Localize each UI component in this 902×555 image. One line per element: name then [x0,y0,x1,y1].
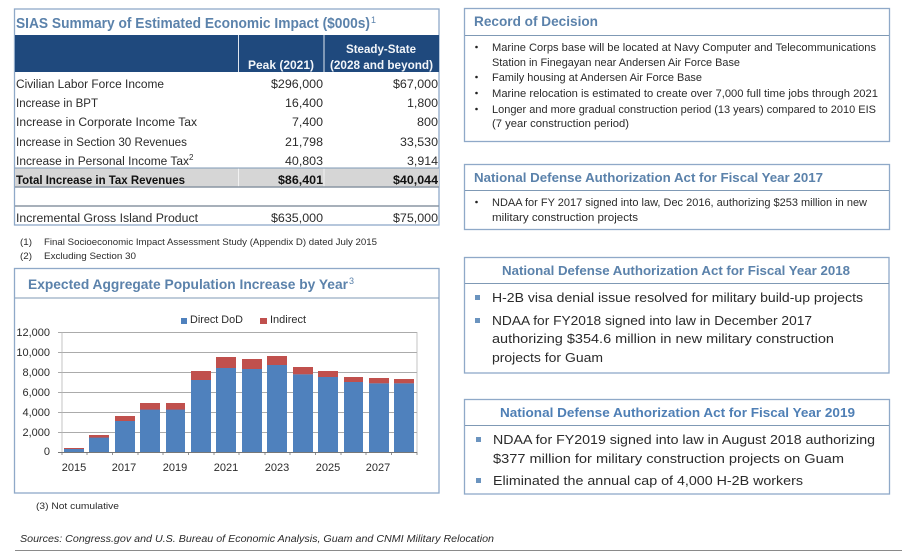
bullet list: NDAA FY2018: authorizing $354.6 million in new military construction [492,332,834,346]
bullet list: NDAA FY2018: projects for Guam [492,351,603,365]
heading: record of decision: Record of Decision [474,13,598,29]
y axis and gridlines: 8,000 [22,367,50,379]
chart legend: Indirect [270,314,306,326]
bullet list: record of decision: Station in Finegayan near Andersen Air Force Base [492,57,740,69]
table row: BPT [16,98,438,110]
table row: gross island product: Incremental Gross Island Product [16,213,199,225]
table row: section 30: 21,798 [285,137,323,149]
table row: personal income tax: 40,803 [285,156,323,168]
x axis with ticks: 2023 [265,462,289,474]
bullet list: NDAA FY2018: NDAA for FY2018 signed into law in December 2017 [492,314,812,328]
chart legend [181,314,306,326]
y axis and gridlines: 2,000 [22,427,50,439]
y axis and gridlines: 0 [44,446,50,458]
table row: personal income tax: Increase in Personal Income Tax [16,156,189,168]
table row: civilian labor force income: $296,000 [271,79,323,91]
bullet list: record of decision: Family housing at Andersen Air Force Base [492,72,702,84]
table header band: Steady-State [346,44,416,56]
table row: section 30 [16,137,438,149]
table row: personal income tax [16,153,439,168]
x axis with ticks: 2017 [112,462,136,474]
bullet list: record of decision: (7 year construction period) [492,118,629,130]
table row: BPT: 16,400 [285,98,323,110]
superscript 1 on heading: 1 [371,15,376,25]
bullet list: NDAA FY2017 [475,197,867,224]
heading: NDAA FY2019: National Defense Authorization Act for Fiscal Year 2019 [500,405,855,420]
panel: record of decision [464,8,890,142]
table row: total tax revenues: Total Increase in Tax Revenues [16,175,185,187]
table row: section 30: 33,530 [400,137,438,149]
table row: corporate income tax: Increase in Corporate Income Tax [16,117,197,129]
panel: SIAS economic impact table [14,9,439,225]
heading: SIAS summary: SIAS Summary of Estimated Economic Impact ($000s) [16,15,370,32]
table row: civilian labor force income [16,79,438,91]
table row: BPT: 1,800 [407,98,438,110]
bullet list: NDAA FY2017: NDAA for FY 2017 signed into law, Dec 2016, authorizing $253 million in new [492,197,867,209]
y axis and gridlines [16,327,417,458]
footnotes to table: Final Socioeconomic Impact Assessment Study (Appendix D) dated July 2015 [44,237,377,248]
bullet list: record of decision: Marine relocation is estimated to create over 7,000 full time jobs through 2021 [492,88,878,100]
x axis with ticks: 2015 [62,462,86,474]
table row: gross island product [16,213,438,225]
heading: expected population increase: Expected Aggregate Population Increase by Year [28,276,349,292]
chart legend: Direct DoD [190,314,243,326]
bullet list: NDAA FY2019 [476,433,875,488]
table row: civilian labor force income: $67,000 [393,79,438,91]
table header band [15,35,439,72]
sources line: Sources: Congress.gov and U.S. Bureau of Economic Analysis, Guam and CNMI Military Relocation [20,533,494,545]
x axis with ticks [58,452,417,474]
panel: population increase chart [14,268,439,493]
bullet list: record of decision: Marine Corps base will be located at Navy Computer and Telecommunications [492,42,877,54]
y axis and gridlines: 6,000 [22,387,50,399]
y axis and gridlines: 12,000 [16,327,50,339]
bullet list: NDAA FY2019: Eliminated the annual cap of 4,000 H-2B workers [493,474,803,488]
x axis with ticks: 2021 [214,462,238,474]
panel: NDAA FY2017 [464,164,890,230]
table row: gross island product: $75,000 [393,213,438,225]
bullet list: NDAA FY2018: H-2B visa denial issue resolved for military build-up projects [492,291,863,305]
table header band: Peak (2021) [248,60,314,72]
table header band: (2028 and beyond) [330,60,433,72]
table row: personal income tax: 2 [189,153,194,162]
bullet list: NDAA FY2018 [475,291,863,365]
panel: NDAA FY2018 [464,258,889,373]
table row: total tax revenues: $86,401 [278,175,324,187]
footnote: not cumulative: (3) Not cumulative [36,501,119,512]
x axis with ticks: 2025 [316,462,340,474]
table row: gross island product: $635,000 [271,213,323,225]
table row: corporate income tax: 7,400 [292,117,323,129]
y axis and gridlines: 4,000 [22,407,50,419]
footnotes to table [20,237,377,262]
table row: civilian labor force income: Civilian Labor Force Income [16,79,164,91]
y axis and gridlines: 10,000 [16,347,50,359]
bullet list: record of decision: Longer and more gradual construction period (13 years) compared to 2010 EIS [492,104,876,116]
table row: personal income tax: 3,914 [407,156,439,168]
panel: NDAA FY2019 [464,400,890,494]
footnotes to table: Excluding Section 30 [44,251,136,262]
footnotes to table: (2) [20,251,32,262]
bullet list: record of decision [475,42,878,130]
table row: section 30: Increase in Section 30 Revenues [16,137,187,149]
superscript 3: 3 [349,276,354,286]
x axis with ticks: 2027 [366,462,390,474]
x axis with ticks: 2019 [163,462,187,474]
heading: NDAA FY2018: National Defense Authorization Act for Fiscal Year 2018 [502,263,850,278]
bullet list: NDAA FY2019: $377 million for military construction projects on Guam [493,452,844,466]
table row: BPT: Increase in BPT [16,98,98,110]
table row: total tax revenues: $40,044 [393,175,439,187]
table row: corporate income tax: 800 [417,117,438,129]
footnotes to table: (1) [20,237,32,248]
table row: total tax revenues [15,168,439,187]
heading: NDAA FY2017: National Defense Authorization Act for Fiscal Year 2017 [474,170,823,185]
bullet list: NDAA FY2019: NDAA for FY2019 signed into law in August 2018 authorizing [493,433,875,447]
stacked bars 2015-2028 [64,356,414,452]
bullet list: NDAA FY2017: military construction projects [492,212,639,224]
table row: corporate income tax [16,117,438,129]
